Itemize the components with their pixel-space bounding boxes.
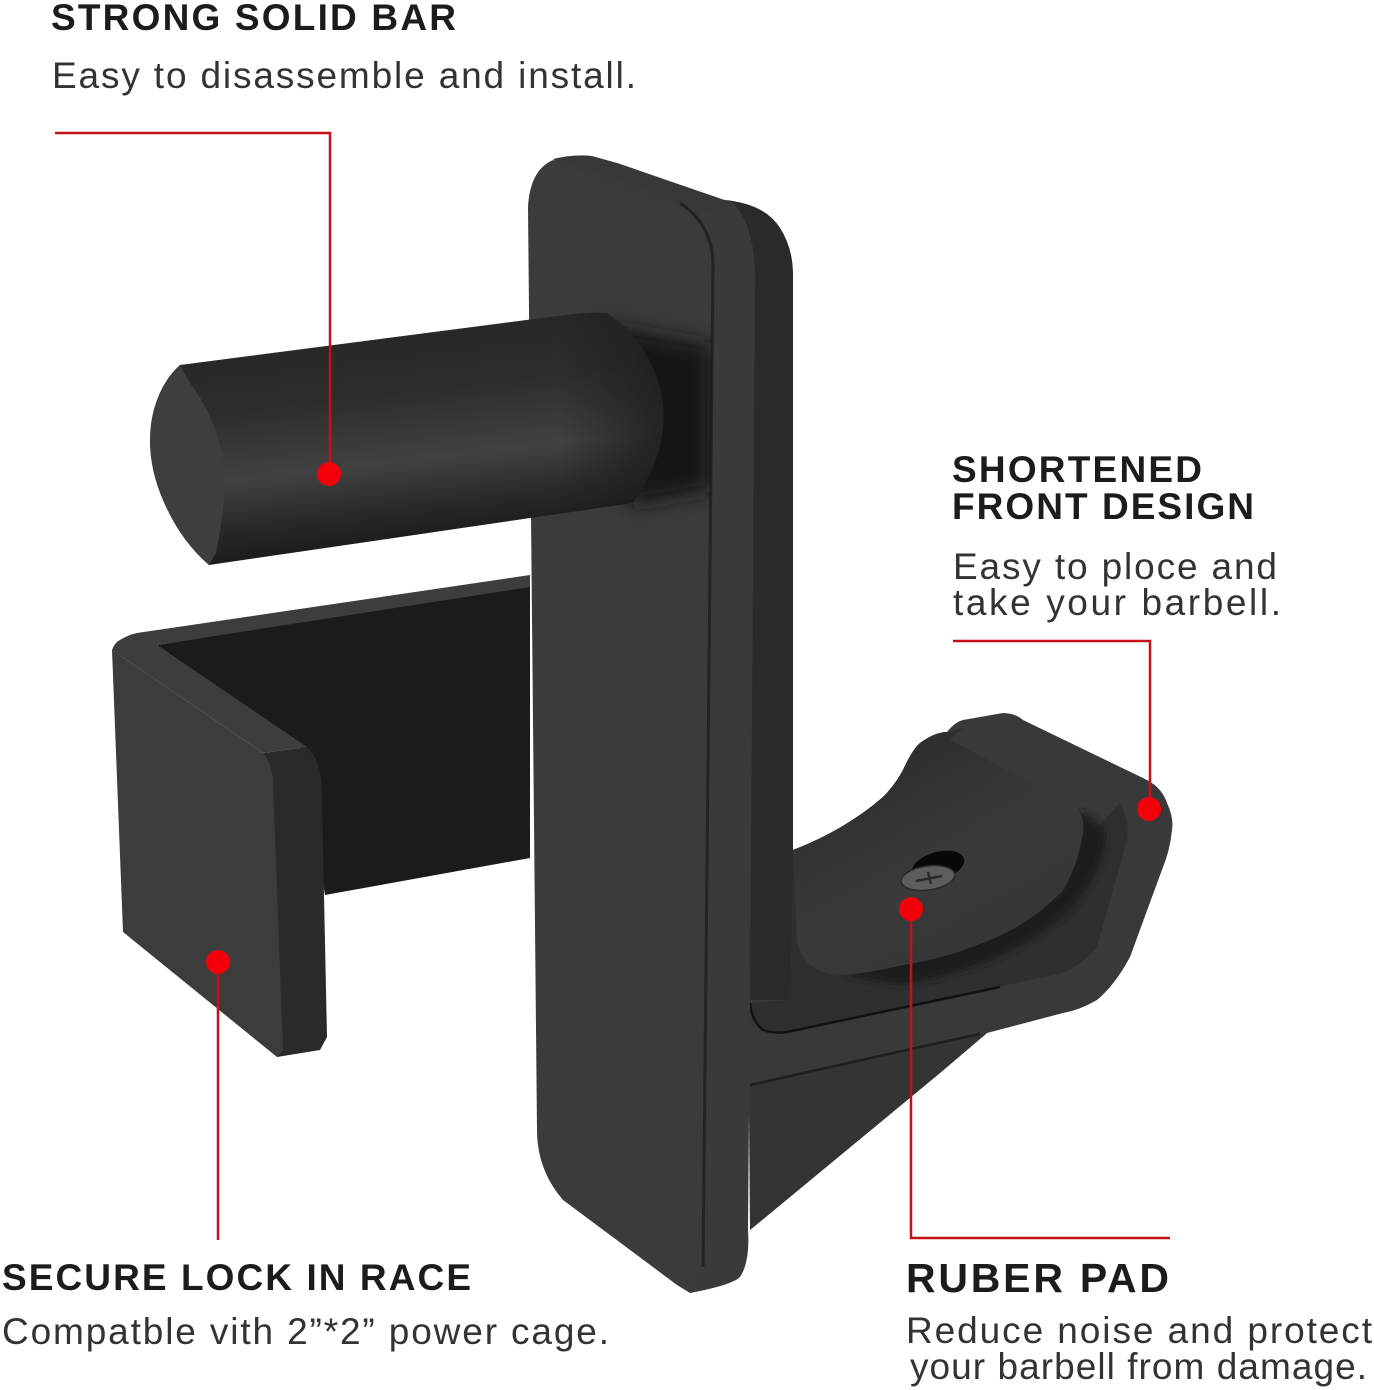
leader line: [217, 962, 219, 1240]
description: Compatble vith 2”*2” power cage.: [2, 1311, 609, 1352]
hook arm front: [112, 650, 283, 1057]
hook top edge: [112, 575, 530, 753]
plate groove: [680, 203, 713, 1267]
cylinder bar: [150, 313, 663, 565]
plate front face: [528, 160, 713, 1293]
leader line: [911, 909, 1170, 1238]
plate back band: [725, 200, 793, 1030]
leader line: [953, 641, 1150, 808]
marker dot: [206, 950, 230, 974]
marker dot: [899, 897, 923, 921]
hook interior wall: [157, 585, 530, 895]
hook arm side: [263, 747, 327, 1057]
callout: secure lock in race: [2, 950, 609, 1352]
rubber pad inner shadow: [843, 810, 1105, 985]
plate middle band: [600, 163, 755, 1293]
bar far end shadow: [560, 313, 663, 514]
marker dot: [1137, 797, 1161, 821]
description: Easy to ploce and: [953, 546, 1277, 587]
rubber pad body: [750, 728, 1128, 1033]
callout: shortened front design: [952, 449, 1281, 821]
bar end cap: [150, 365, 225, 565]
plate top bevel: [553, 155, 733, 215]
heading: SECURE LOCK IN RACE: [2, 1257, 471, 1298]
screw: [900, 862, 956, 894]
callout: ruber pad: [899, 897, 1373, 1387]
heading: RUBER PAD: [906, 1255, 1169, 1301]
screw hole: [908, 845, 968, 887]
shadow cast by bar: [600, 325, 712, 505]
hook outer body and rim: [748, 713, 1172, 1230]
description line two: take your barbell.: [953, 582, 1281, 623]
description line two: your barbell from damage.: [910, 1346, 1367, 1387]
heading line two: FRONT DESIGN: [952, 486, 1254, 527]
description: Reduce noise and protect: [906, 1310, 1373, 1351]
product: J-hook bracket: [112, 155, 1172, 1293]
rubber pad edge shadow: [750, 987, 1000, 1033]
description: Easy to disassemble and install.: [52, 55, 636, 96]
gusset crease line: [750, 1034, 980, 1085]
rubber pad raised lip: [950, 728, 1120, 830]
gusset lower panel: [750, 1033, 987, 1230]
marker dot: [317, 462, 341, 486]
heading: SHORTENED: [952, 449, 1202, 490]
callout: strong solid bar: [51, 0, 636, 486]
rubber pad seat: [793, 738, 1083, 975]
leader line: [55, 133, 330, 474]
